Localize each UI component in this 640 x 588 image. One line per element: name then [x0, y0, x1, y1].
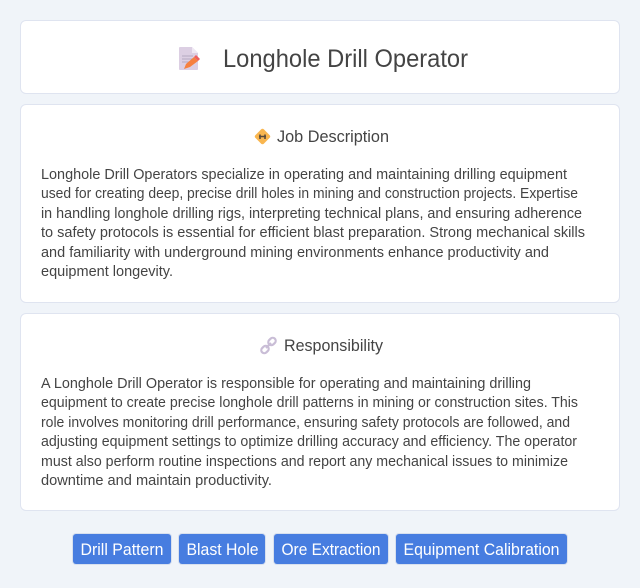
icon: construction diamond	[254, 128, 270, 144]
tag: drill pattern	[73, 534, 171, 564]
text: job description: equipment longevity.	[41, 264, 173, 280]
icon: chain link	[260, 336, 277, 354]
tag: blast hole: Blast Hole	[186, 541, 258, 559]
tag: ore extraction: Ore Extraction	[282, 541, 380, 559]
text: job description: to safety protocols is essential for efficient blast preparation. Strong mechanical skills	[41, 225, 585, 241]
icon: document with pencil	[179, 47, 200, 70]
text: job description: used for creating deep, precise drill holes in mining and construction projects. Expertise	[41, 186, 578, 202]
panel: responsibility	[20, 313, 620, 511]
heading: job description: Job Description	[277, 127, 389, 146]
text: responsibility: A Longhole Drill Operator is responsible for operating and maintaining drilling	[41, 376, 531, 392]
text: responsibility	[41, 376, 578, 489]
text: responsibility: equipment to create precise longhole drill patterns in mining or construction sites. This	[41, 395, 578, 411]
text: responsibility: role involves monitoring drill performance, ensuring safety protocols are followed, and	[41, 415, 570, 431]
panel: job description	[20, 104, 620, 303]
text: job description	[41, 167, 585, 280]
tag: ore extraction	[274, 534, 388, 564]
text: responsibility: downtime and maintain productivity.	[41, 473, 272, 489]
tag: blast hole	[179, 534, 265, 564]
tag: equipment calibration	[396, 534, 567, 564]
tag: drill pattern: Drill Pattern	[80, 541, 164, 559]
title: Longhole Drill Operator	[223, 45, 468, 73]
heading: responsibility: Responsibility	[284, 336, 383, 355]
text: responsibility: must also perform routine inspections and report any mechanical issues to minimize	[41, 454, 568, 470]
text: responsibility: adjusting equipment settings to optimize drilling accuracy and efficiency. The operator	[41, 434, 577, 450]
text: job description: Longhole Drill Operators specialize in operating and maintaining drilling equipment	[41, 167, 567, 183]
panel: title card	[20, 20, 620, 94]
text: job description: in handling longhole drilling rigs, interpreting technical plans, and ensuring adherence	[41, 206, 582, 222]
text: job description: and familiarity with underground mining environments enhance productivity and	[41, 245, 549, 261]
tag: equipment calibration: Equipment Calibration	[404, 541, 560, 559]
